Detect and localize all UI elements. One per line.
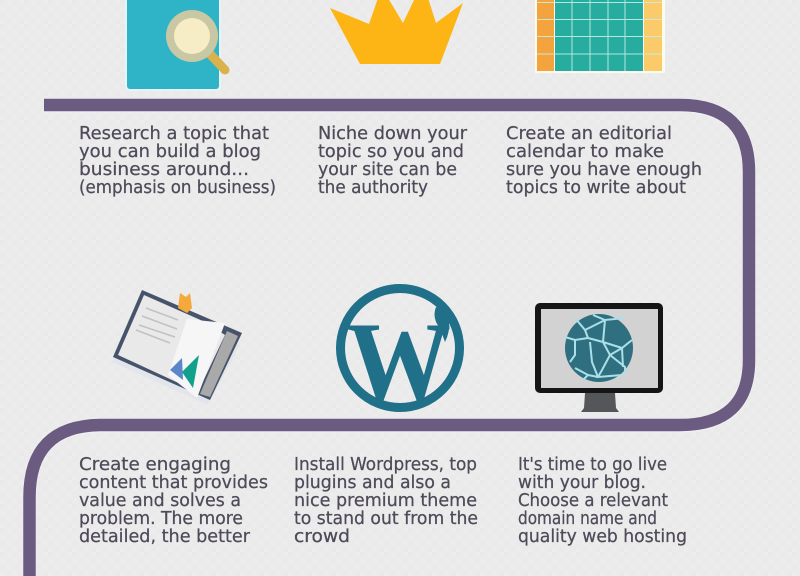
- text: research a topic: [79, 124, 276, 198]
- text: niche down: [318, 124, 468, 198]
- text: research a topic: (emphasis on business): [79, 178, 276, 198]
- text: engaging content: [79, 455, 268, 547]
- text: editorial calendar: sure you have enough: [506, 160, 702, 180]
- icon: crown: [330, 0, 463, 64]
- icon: bookmark: [178, 293, 192, 313]
- text: research a topic: you can build a blog: [79, 142, 261, 162]
- text: install wordpress: nice premium theme: [294, 491, 477, 511]
- text: niche down: the authority: [318, 178, 428, 198]
- text: go live: with your blog.: [518, 473, 646, 493]
- icon: open book: [112, 290, 242, 405]
- text: install wordpress: Install Wordpress, top: [294, 455, 477, 475]
- text: niche down: your site can be: [318, 160, 457, 180]
- text: engaging content: content that provides: [79, 473, 268, 493]
- text: editorial calendar: [506, 124, 702, 198]
- text: editorial calendar: Create an editorial: [506, 124, 672, 144]
- text: editorial calendar: topics to write about: [506, 178, 686, 198]
- icon: editorial calendar: [535, 0, 665, 73]
- text: go live: [518, 455, 687, 547]
- text: install wordpress: plugins and also a: [294, 473, 451, 493]
- icon: monitor with globe: [535, 303, 663, 412]
- text: niche down: Niche down your: [318, 124, 468, 144]
- text: engaging content: Create engaging: [79, 455, 231, 475]
- icon: research card with magnifier: [125, 0, 225, 91]
- text: research a topic: business around...: [79, 160, 249, 180]
- text: install wordpress: [294, 455, 478, 547]
- text: engaging content: detailed, the better: [79, 527, 251, 547]
- timeline path: [30, 105, 749, 576]
- text: go live: quality web hosting: [518, 527, 687, 547]
- text: install wordpress: to stand out from the: [294, 509, 478, 529]
- icon: globe: [565, 314, 633, 382]
- text: engaging content: value and solves a: [79, 491, 241, 511]
- text: niche down: topic so you and: [318, 142, 464, 162]
- text: go live: domain name and: [518, 509, 657, 529]
- text: research a topic: Research a topic that: [79, 124, 269, 144]
- text: go live: It's time to go live: [518, 455, 667, 475]
- text: go live: Choose a relevant: [518, 491, 668, 511]
- text: engaging content: problem. The more: [79, 509, 243, 529]
- icon: wordpress logo: W: [347, 300, 451, 425]
- text: install wordpress: crowd: [294, 527, 350, 547]
- text: editorial calendar: calendar to make: [506, 142, 664, 162]
